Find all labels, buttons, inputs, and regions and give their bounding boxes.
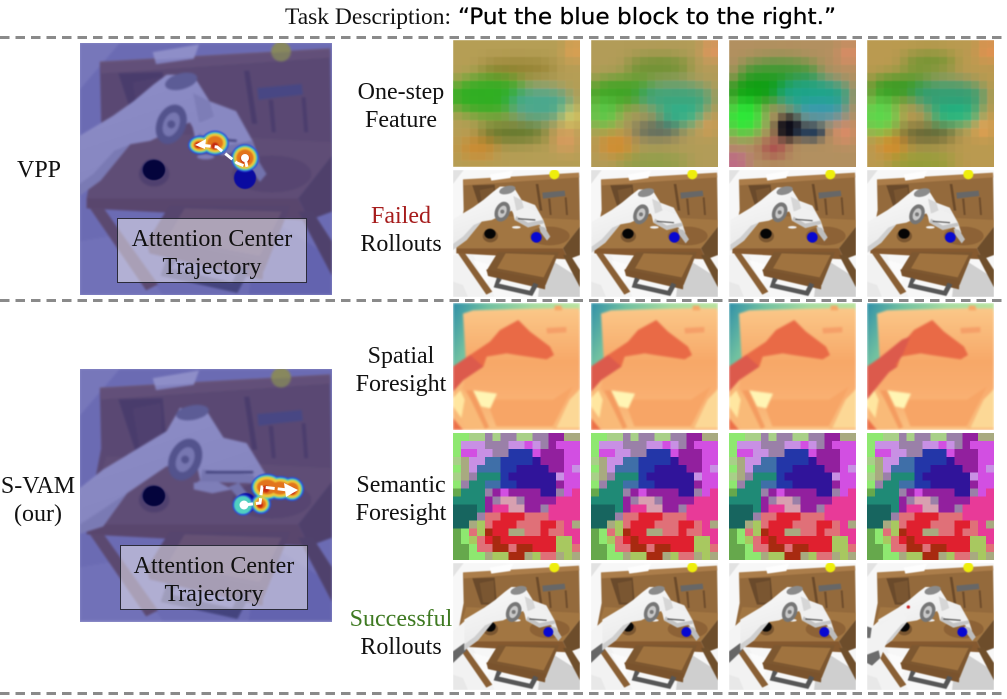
panel: S-VAM attention map — [80, 369, 332, 622]
panel: spatial foresight 3 — [729, 303, 856, 430]
title: task description: “Put the blue block to the right.” — [458, 5, 836, 30]
panel: failed rollout 3 — [729, 170, 856, 297]
panel: semantic foresight 4 — [867, 433, 994, 560]
panel: successful rollout 4 — [867, 563, 994, 690]
callout: S-VAM attention center trajectory: Attention Center — [134, 553, 294, 579]
attention center trajectory arrow — [240, 483, 298, 510]
row label: VPP: VPP — [17, 157, 61, 183]
row label: Spatial Foresight: Foresight — [356, 371, 446, 397]
icon: blue block and hole — [143, 486, 256, 513]
attention center trajectory arrow — [195, 139, 249, 167]
row label: One-step Feature: One-step — [358, 79, 444, 105]
callout: VPP attention center trajectory: Attention Center — [132, 226, 292, 252]
row label: Semantic Foresight: Semantic — [356, 472, 446, 498]
row label: Failed Rollouts: Rollouts — [360, 231, 442, 257]
panel: successful rollout 1 — [453, 563, 580, 690]
row label: Spatial Foresight: Spatial — [368, 343, 434, 369]
callout: S-VAM attention center trajectory — [120, 545, 308, 610]
panel: failed rollout 2 — [591, 170, 718, 297]
row label: One-step Feature: Feature — [365, 107, 437, 133]
row label: S-VAM (our): (our) — [14, 501, 62, 527]
title: task description: Task Description: — [285, 4, 451, 30]
row label: Successful Rollouts — [350, 606, 452, 660]
panel: semantic foresight 1 — [453, 433, 580, 560]
row label: Failed Rollouts — [360, 203, 442, 257]
heatmap blobs — [232, 474, 304, 516]
panel: spatial foresight 2 — [591, 303, 718, 430]
panel: one-step feature 1 — [453, 40, 580, 167]
panel: spatial foresight 1 — [453, 303, 580, 430]
panel: one-step feature 3 — [729, 40, 856, 167]
row label: Failed Rollouts: Failed — [371, 203, 431, 229]
icon: blue block and hole — [143, 160, 256, 189]
row label: Successful Rollouts: Rollouts — [360, 634, 442, 660]
panel: one-step feature 4 — [867, 40, 994, 167]
row label: S-VAM (our) — [1, 473, 75, 527]
row label: Successful Rollouts: Successful — [350, 606, 452, 632]
panel: semantic foresight 3 — [729, 433, 856, 560]
panel: VPP attention map — [80, 43, 332, 295]
callout: S-VAM attention center trajectory: Trajectory — [164, 581, 264, 607]
callout: VPP attention center trajectory — [117, 218, 307, 283]
row label: S-VAM (our): S-VAM — [1, 473, 75, 499]
row label: Spatial Foresight — [356, 343, 446, 397]
heatmap blobs — [188, 130, 259, 172]
title: task description — [285, 4, 836, 30]
panel: successful rollout 3 — [729, 563, 856, 690]
panel: failed rollout 4 — [867, 170, 994, 297]
row label: One-step Feature — [358, 79, 444, 133]
panel: failed rollout 1 — [453, 170, 580, 297]
callout: VPP attention center trajectory: Trajectory — [162, 254, 262, 280]
panel: one-step feature 2 — [591, 40, 718, 167]
panel: successful rollout 2 — [591, 563, 718, 690]
panel: spatial foresight 4 — [867, 303, 994, 430]
row label: Semantic Foresight: Foresight — [356, 500, 446, 526]
panel: semantic foresight 2 — [591, 433, 718, 560]
row label: Semantic Foresight — [356, 472, 446, 526]
